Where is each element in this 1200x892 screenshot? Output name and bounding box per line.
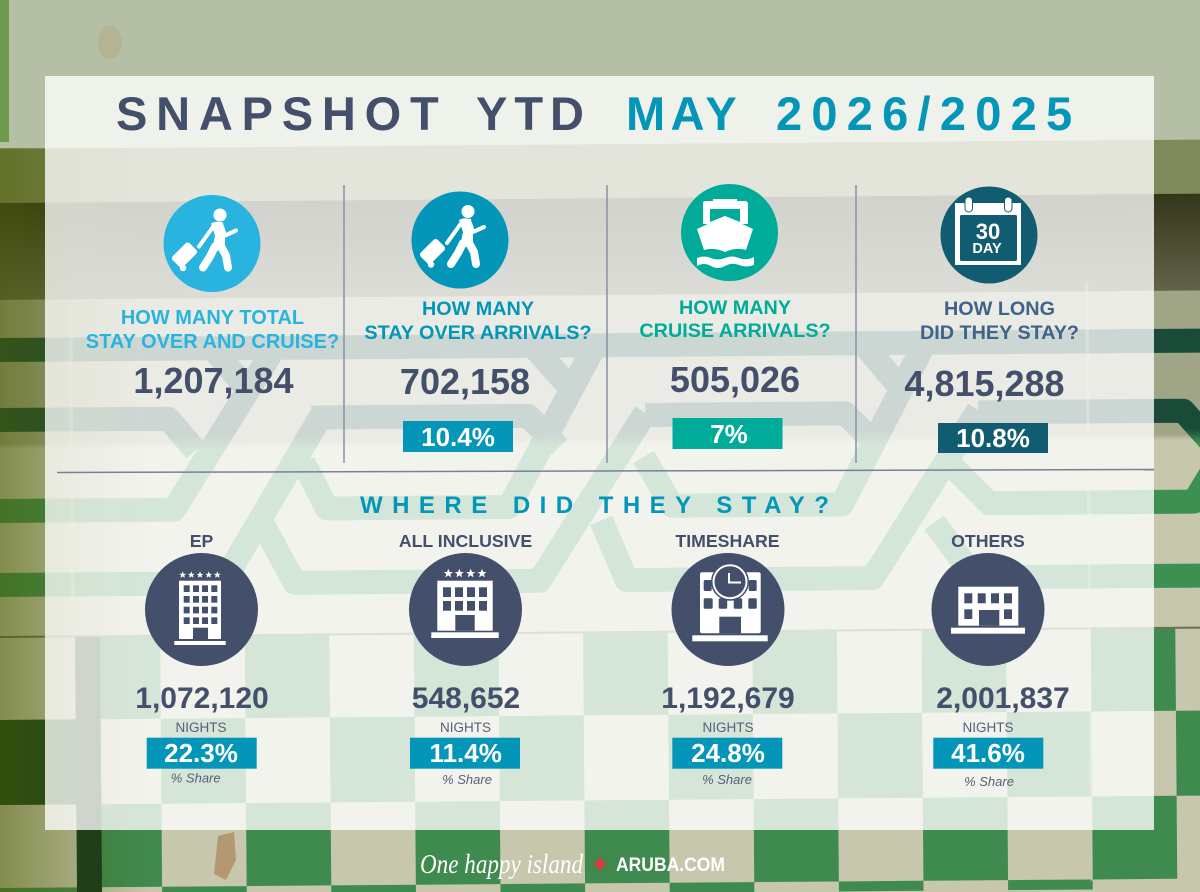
badge: all inclusive share (410, 738, 520, 769)
icon: traveller with suitcase, light blue (164, 195, 260, 292)
icon: five star hotel (145, 553, 258, 666)
number: total arrivals: 1,207,184 (133, 360, 294, 401)
label: share: % Share (442, 772, 492, 787)
tagline: One happy island (420, 849, 583, 879)
number: stay over arrivals: 702,158 (400, 361, 530, 402)
website: ARUBA.COM (616, 855, 725, 876)
number: timeshare nights: 1,192,679 (661, 682, 795, 715)
badge: cruise change (672, 418, 782, 449)
badge: EP share: 22.3% (164, 738, 238, 768)
badge: stay over change: 10.4% (421, 422, 495, 452)
icon: four star hotel (409, 553, 522, 666)
footer logo (420, 849, 725, 879)
panel: others (932, 531, 1070, 789)
label: how long: HOW LONG (944, 298, 1055, 320)
label: how long: DID THEY STAY? (920, 322, 1079, 344)
panel: EP (135, 531, 269, 786)
number: all inclusive nights: 548,652 (412, 682, 520, 715)
icon: cruise ship (681, 184, 778, 281)
badge: others share (933, 738, 1043, 769)
label: how many stay over: STAY OVER ARRIVALS? (364, 322, 592, 344)
panel: total stay over and cruise (86, 195, 339, 401)
label: how many total: HOW MANY TOTAL (121, 307, 304, 329)
heading: where did they stay: WHERE DID THEY STAY? (360, 492, 838, 519)
label: how many cruise: CRUISE ARRIVALS? (639, 320, 831, 342)
title: YTD (476, 87, 591, 140)
icon: traveller with suitcase, blue (412, 192, 508, 288)
number: other nights: 2,001,837 (936, 682, 1070, 715)
translucent white panel (45, 76, 1154, 830)
badge: stay over change (403, 421, 513, 452)
label: EP: EP (190, 531, 213, 551)
label: others: OTHERS (951, 531, 1025, 551)
icon: low-rise building (932, 553, 1044, 666)
label: nights: NIGHTS (702, 720, 754, 735)
panel: length of stay (904, 186, 1079, 453)
panel: stay over arrivals (364, 192, 592, 452)
badge: timeshare share (672, 738, 782, 769)
number: EP nights: 1,072,120 (135, 682, 269, 715)
label: all inclusive: ALL INCLUSIVE (399, 531, 532, 551)
badge: nights change: 10.8% (956, 423, 1030, 453)
icon: calendar 30 day (940, 186, 1038, 284)
badge: EP share (147, 738, 257, 769)
panel: cruise arrivals (639, 184, 831, 449)
badge: others share: 41.6% (951, 738, 1025, 768)
label: how many cruise: HOW MANY (679, 297, 791, 319)
icon: red star (592, 855, 608, 873)
title: SNAPSHOT (116, 87, 448, 140)
label: share: % Share (702, 772, 752, 787)
icon: calendar 30 day: 30 (976, 219, 1000, 244)
panel: all inclusive (399, 531, 532, 787)
badge: cruise change: 7% (710, 419, 748, 449)
label: share: % Share (171, 771, 221, 786)
label: timeshare: TIMESHARE (675, 531, 780, 551)
label: share: % Share (964, 774, 1014, 789)
badge: all inclusive share: 11.4% (430, 738, 502, 768)
icon: timeshare building with clock (672, 553, 784, 666)
label: nights: NIGHTS (440, 720, 491, 735)
label: nights: NIGHTS (962, 720, 1014, 735)
title: 2026/2025 (776, 87, 1081, 140)
label: how many total: STAY OVER AND CRUISE? (86, 331, 339, 353)
label: nights: NIGHTS (175, 720, 227, 735)
label: how many stay over: HOW MANY (422, 298, 534, 320)
badge: timeshare share: 24.8% (691, 738, 765, 768)
panel: timeshare (661, 531, 795, 787)
badge: nights change (938, 423, 1048, 453)
number: visitor nights: 4,815,288 (904, 363, 1065, 404)
title: MAY (626, 87, 742, 140)
divider lines (57, 185, 1154, 472)
icon: calendar 30 day: DAY (972, 241, 1002, 257)
number: cruise arrivals: 505,026 (670, 359, 800, 400)
